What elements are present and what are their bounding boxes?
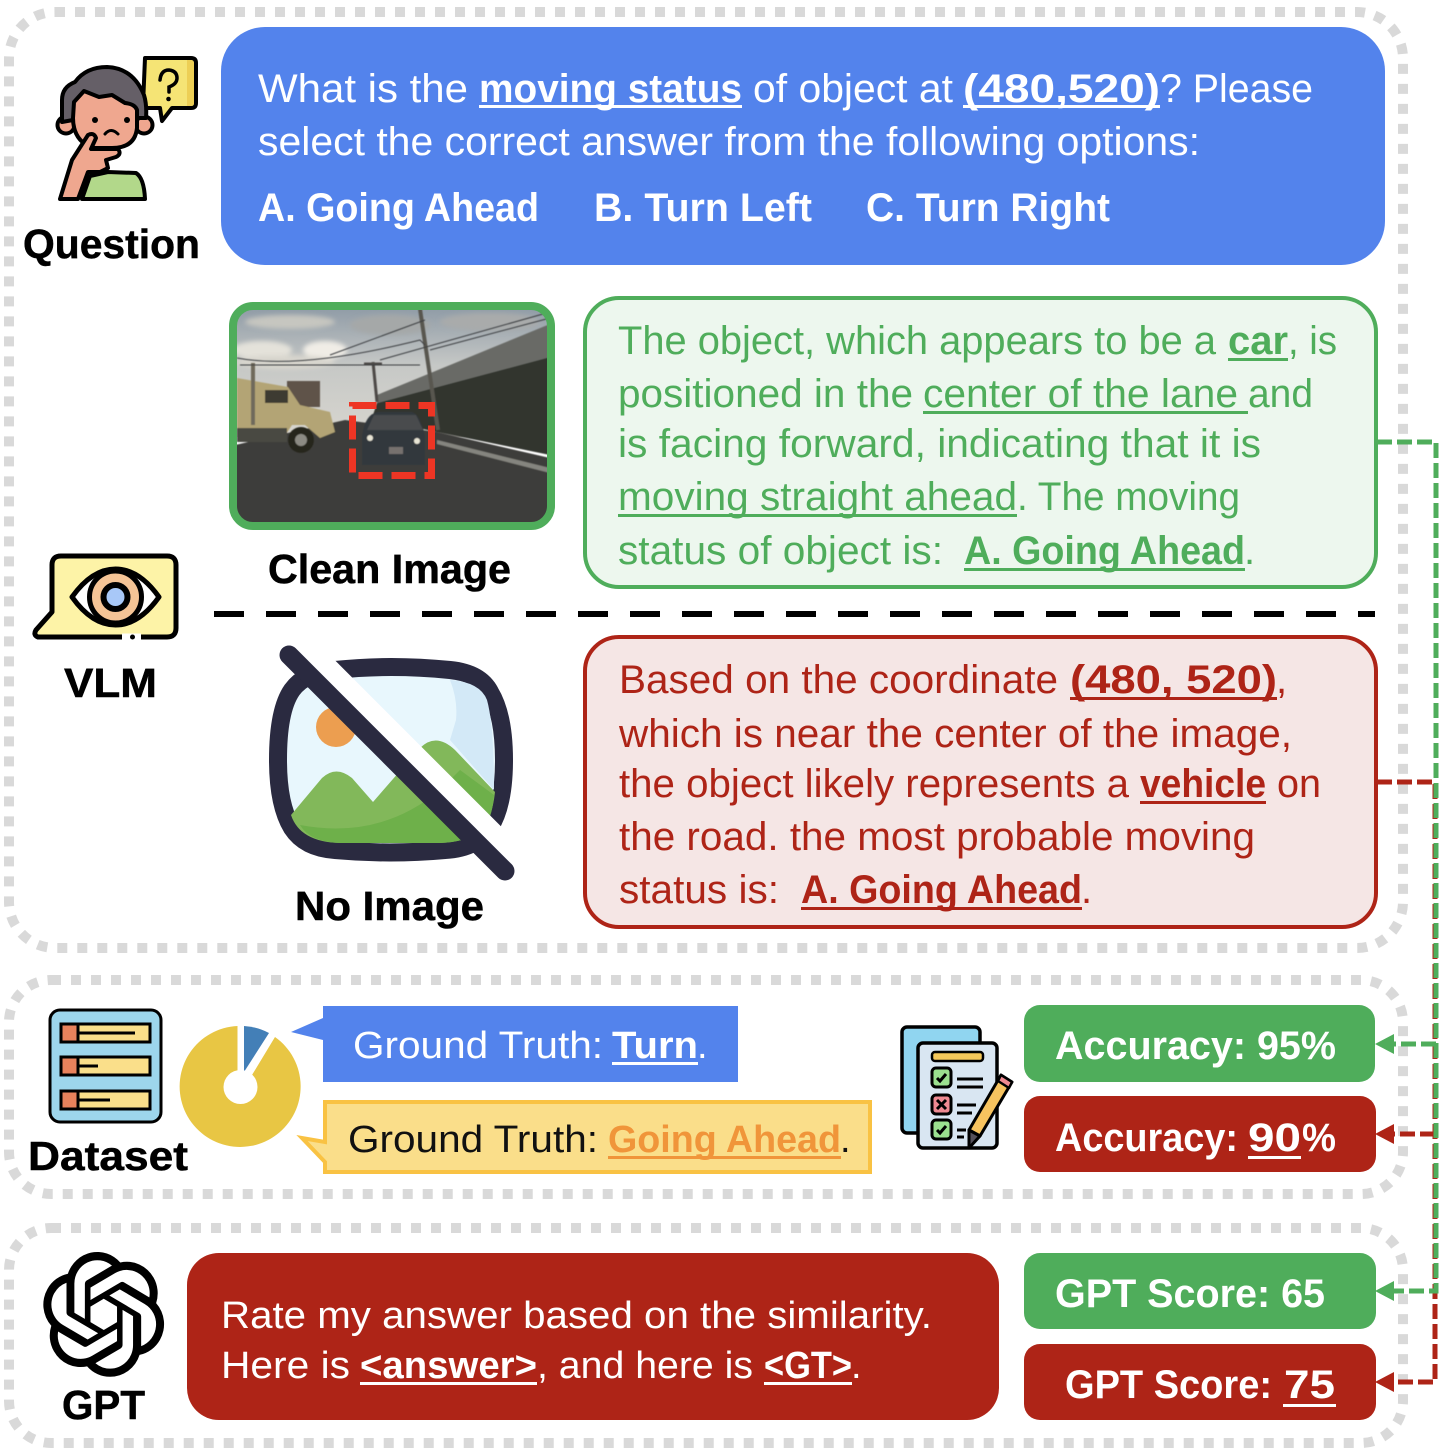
answer text, green: car xyxy=(1228,319,1288,363)
callout: ground truth going ahead xyxy=(302,1102,870,1172)
no image answer panel xyxy=(585,637,1376,927)
score: GPT 75 no image: 75 xyxy=(1284,1363,1335,1407)
icon: thinking person with question bubble xyxy=(58,58,196,199)
answer text, green: The object, which appears to be a xyxy=(618,319,1217,363)
callout: ground truth going ahead: . xyxy=(840,1119,851,1161)
score: accuracy 90 no image: % xyxy=(1302,1116,1336,1160)
question text: select the correct answer from the following options: xyxy=(258,120,1200,164)
panel: dataset and accuracy xyxy=(9,980,1403,1194)
answer text, red: status is: xyxy=(619,868,779,912)
label: Clean Image: Clean Image xyxy=(268,546,511,592)
question panel xyxy=(221,27,1385,265)
answer text, green xyxy=(618,319,1337,573)
answer text, red: which is near the center of the image, xyxy=(618,712,1292,756)
score: accuracy 95 clean xyxy=(1024,1005,1375,1082)
callout: ground truth turn: Ground Truth: xyxy=(353,1025,603,1067)
answer text, red: A. Going Ahead xyxy=(801,868,1082,912)
answer text, green: positioned in the xyxy=(618,372,913,416)
score: GPT 75 no image: GPT Score: xyxy=(1065,1363,1272,1407)
answer text, red xyxy=(618,658,1321,912)
clean image answer panel xyxy=(585,298,1376,587)
question text: ? Please xyxy=(1160,67,1313,111)
answer text, red: Based on the coordinate xyxy=(619,658,1058,702)
connector: red dashed arrows from no-image answer to scores xyxy=(1375,782,1435,1392)
answer text, red: , xyxy=(1276,658,1287,702)
score: GPT 65 clean: GPT Score: 65 xyxy=(1055,1272,1325,1316)
heading: VLM: VLM xyxy=(64,660,157,706)
answer text, red: (480, 520) xyxy=(1070,658,1277,702)
icon: VLM eye speech bubble xyxy=(35,556,176,640)
GPT prompt panel: <answer> xyxy=(360,1345,537,1387)
icon: no image xyxy=(278,650,515,871)
panel: VLM responses xyxy=(9,12,1403,948)
score: accuracy 90 no image: 90 xyxy=(1248,1116,1301,1160)
question text: of object at xyxy=(753,67,953,111)
answer text, red: vehicle xyxy=(1140,762,1266,806)
answer text, red: the object likely represents a xyxy=(619,762,1130,806)
answer text, green: center of the lane xyxy=(923,372,1238,416)
answer text, red: . xyxy=(1081,868,1092,912)
callout: ground truth turn: . xyxy=(697,1025,708,1067)
callout: ground truth going ahead: Ground Truth: xyxy=(348,1119,598,1161)
callout: ground truth turn xyxy=(291,1006,738,1082)
answer text, red: on xyxy=(1277,762,1321,806)
answer text, green: . xyxy=(1244,529,1255,573)
answer text, green: , is xyxy=(1288,319,1337,363)
label: No Image: No Image xyxy=(295,883,484,929)
panel: GPT score xyxy=(9,1228,1403,1443)
score: accuracy 95 clean: Accuracy: 95% xyxy=(1055,1024,1336,1068)
question text: What is the xyxy=(258,67,468,111)
question text xyxy=(258,67,1313,230)
GPT prompt panel: Here is xyxy=(221,1345,350,1387)
answer text, green: and xyxy=(1248,372,1313,416)
question text: C. Turn Right xyxy=(866,186,1110,230)
GPT prompt panel: <GT> xyxy=(764,1345,852,1387)
callout: ground truth going ahead: Going Ahead xyxy=(608,1119,841,1161)
icon: checklist with pencil xyxy=(902,1027,1012,1148)
answer text, green: . The moving xyxy=(1017,475,1240,519)
answer text, green: is facing forward, indicating that it is xyxy=(618,422,1261,466)
GPT prompt panel: . xyxy=(851,1345,862,1387)
question text: (480,520) xyxy=(963,67,1160,111)
icon: dataset list xyxy=(50,1010,161,1122)
GPT prompt panel: , and here is xyxy=(537,1345,753,1387)
answer text, red: the road. the most probable moving xyxy=(619,815,1255,859)
clean image: road photo with red target box xyxy=(232,306,551,526)
heading: GPT: GPT xyxy=(62,1382,145,1428)
heading: Question: Question xyxy=(23,221,200,267)
GPT prompt panel: Rate my answer based on the similarity. xyxy=(221,1295,932,1337)
answer text, green: moving straight ahead xyxy=(618,475,1017,519)
answer text, green: status of object is: xyxy=(618,529,943,573)
score: accuracy 90 no image xyxy=(1024,1096,1376,1172)
icon: GPT knot logo xyxy=(43,1252,164,1377)
question text: A. Going Ahead xyxy=(258,186,539,230)
score: GPT 65 clean xyxy=(1024,1253,1376,1329)
callout: ground truth turn: Turn xyxy=(612,1025,698,1067)
chart: ground truth pie xyxy=(180,1026,301,1147)
score: accuracy 90 no image: Accuracy: xyxy=(1055,1116,1238,1160)
GPT prompt panel xyxy=(187,1253,999,1420)
question text: moving status xyxy=(479,67,742,111)
question text: B. Turn Left xyxy=(594,186,812,230)
heading: Dataset: Dataset xyxy=(28,1133,188,1179)
score: GPT 75 no image xyxy=(1024,1344,1376,1420)
connector: green dashed arrows from clean-image answer to scores xyxy=(1375,442,1436,1301)
answer text, green: A. Going Ahead xyxy=(964,529,1245,573)
divider: dashed line between clean image and no image xyxy=(214,611,1375,617)
